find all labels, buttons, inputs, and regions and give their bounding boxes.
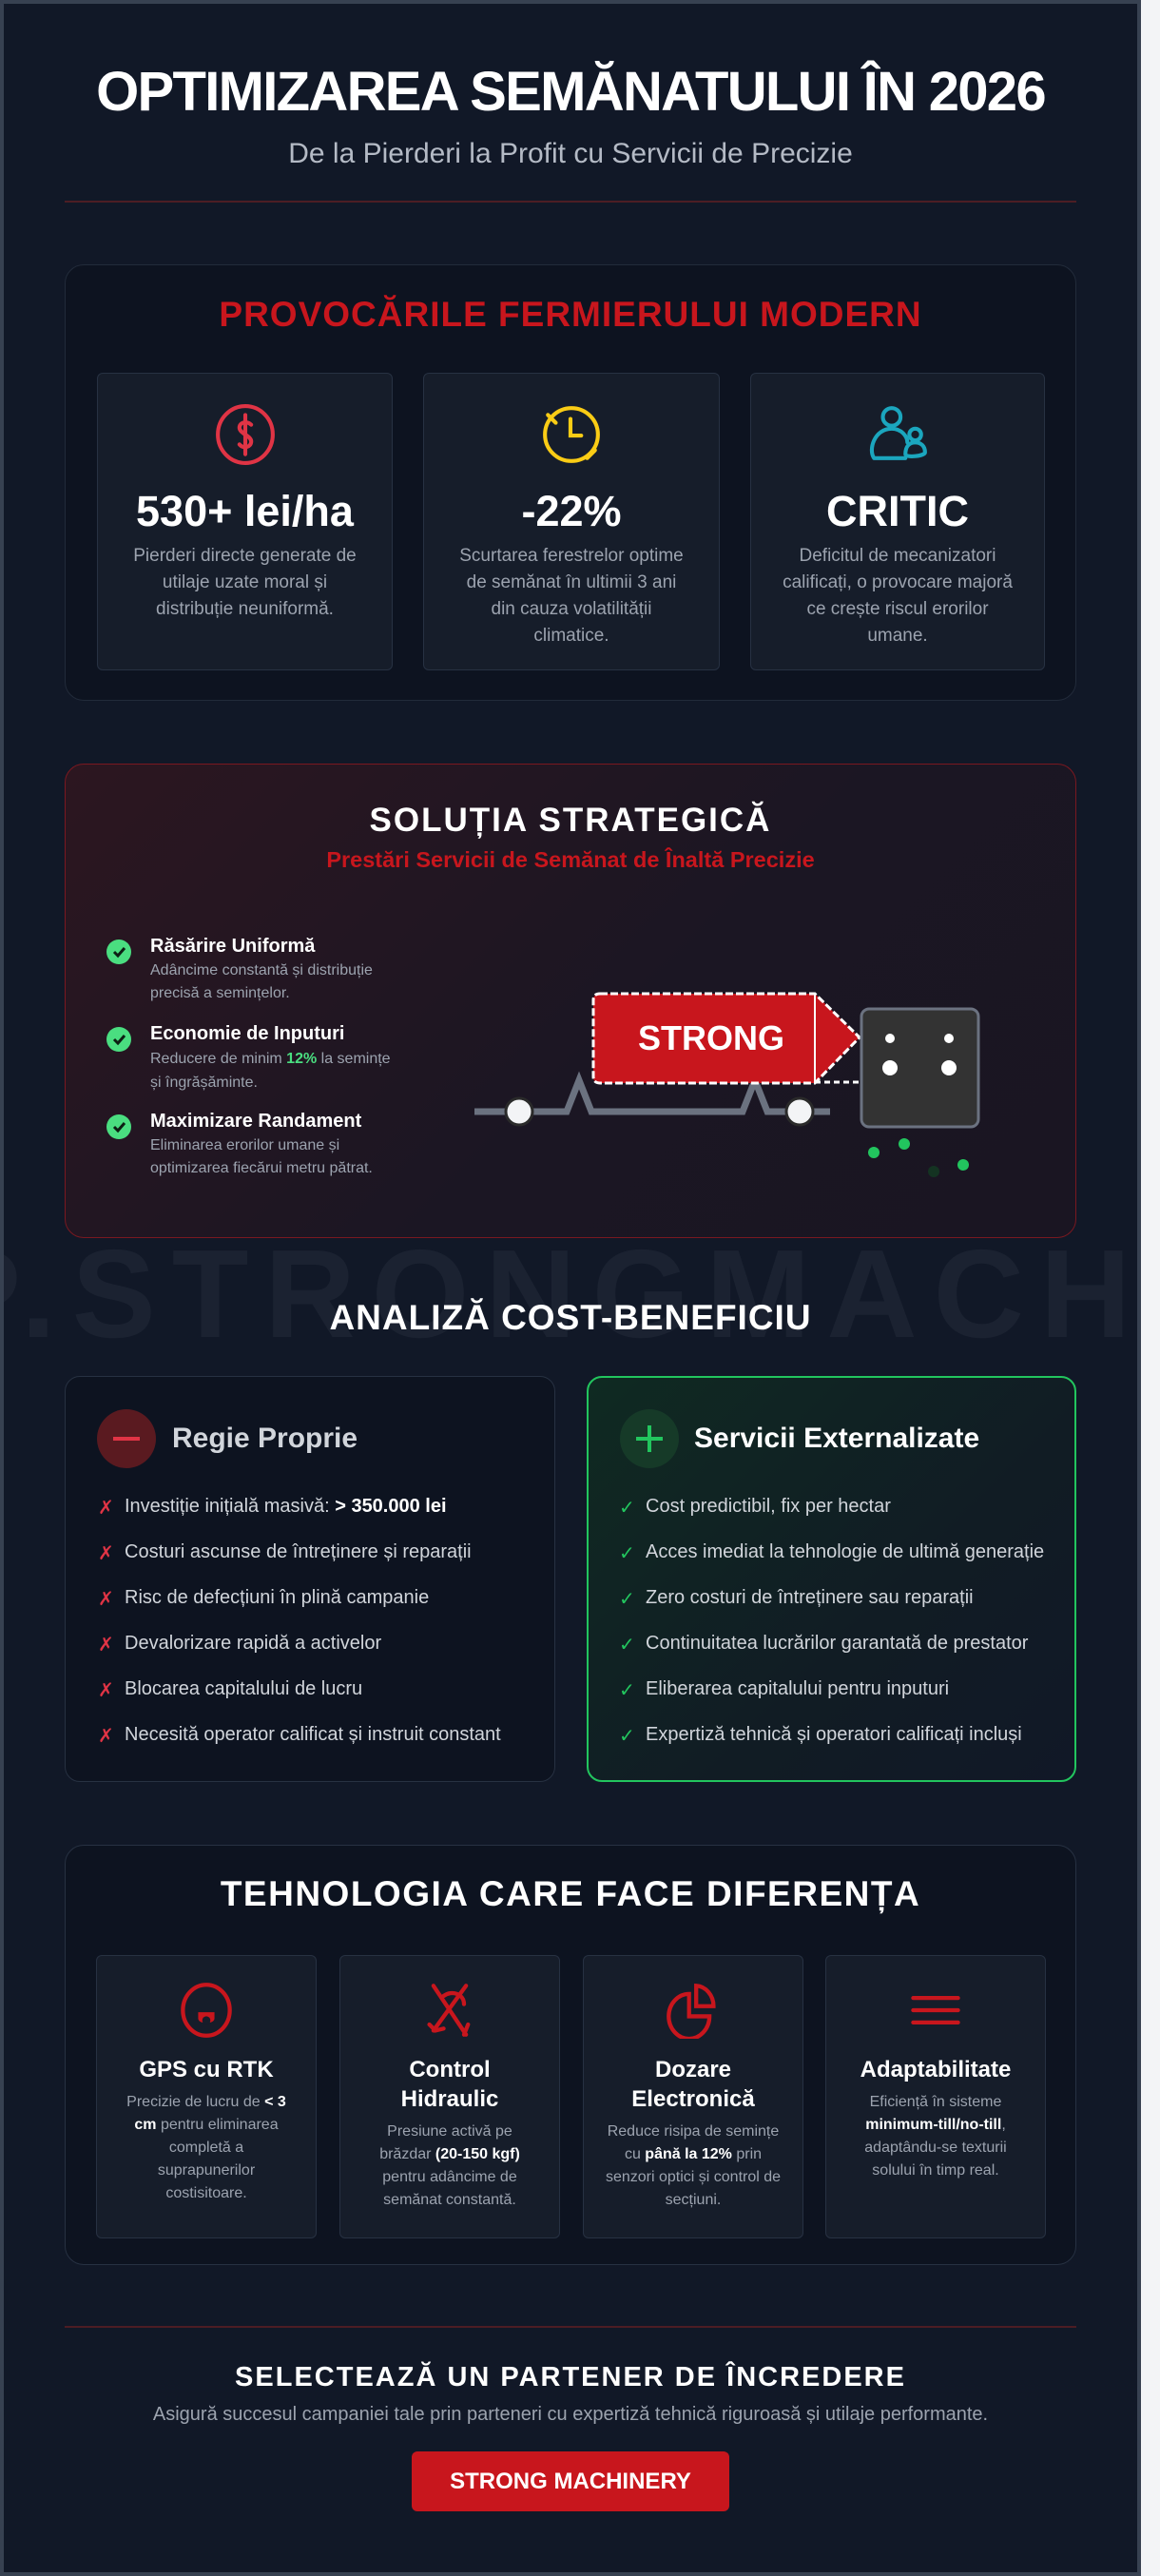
heading: solution: SOLUȚIA STRATEGICĂ xyxy=(370,802,771,839)
panel: own fleet: ✗ xyxy=(98,1498,114,1519)
panel: own fleet: Costuri ascunse de întreținere și reparații xyxy=(125,1541,472,1562)
illustration: seeder xyxy=(474,993,979,1177)
panel: outsourced: ✓ xyxy=(619,1543,635,1564)
heading: own: Regie Proprie xyxy=(172,1423,358,1454)
panel: outsourced: ✓ xyxy=(619,1726,635,1747)
checklist xyxy=(106,936,391,1176)
list: cons: Investiție inițială masivă: > 350.000 lei xyxy=(125,1496,447,1517)
card: hydraulic xyxy=(339,1955,560,2238)
panel: own fleet: Devalorizare rapidă a activelor xyxy=(125,1633,381,1654)
stat: 530+ lei/ha xyxy=(136,487,354,535)
card: workforce xyxy=(750,373,1045,670)
card: window: Scurtarea ferestrelor optime de semănat în ultimii 3 ani din cauza volatilității climatice. xyxy=(459,546,684,646)
heading: cost-benefit: ANALIZĂ COST-BENEFICIU xyxy=(329,1298,812,1337)
panel: outsourced: ✓ xyxy=(619,1589,635,1610)
icon: clock xyxy=(543,406,600,463)
panel: own fleet: Blocarea capitalului de lucru xyxy=(125,1678,362,1699)
panel: own fleet: ✗ xyxy=(98,1635,114,1656)
card: hydraulic: Control Hidraulic xyxy=(401,2057,498,2112)
panel: own fleet: Risc de defecțiuni în plină campanie xyxy=(125,1587,429,1608)
card: GPS: Precizie de lucru de < 3 cm pentru eliminarea completă a suprapunerilor costisitoare. xyxy=(126,2094,286,2201)
panel: own fleet: ✗ xyxy=(98,1543,114,1564)
icon: plus xyxy=(620,1409,679,1468)
panel: outsourced: ✓ xyxy=(619,1635,635,1656)
panel: outsourced: Continuitatea lucrărilor garantată de prestator xyxy=(646,1633,1028,1654)
panel: own fleet: ✗ xyxy=(98,1680,114,1701)
subheading: Prestări Servicii de Semănat de Înaltă Precizie xyxy=(326,847,815,872)
card: dosing xyxy=(583,1955,803,2238)
panel: own fleet: ✗ xyxy=(98,1726,114,1747)
illustration: seeder: STRONG xyxy=(638,1018,784,1057)
icon: dollar xyxy=(216,404,275,465)
item: uniform: Răsărire Uniformă xyxy=(150,936,315,957)
panel: outsourced: ✓ xyxy=(619,1498,635,1519)
card: dosing: Dozare Electronică xyxy=(631,2057,755,2112)
card: losses xyxy=(97,373,393,670)
button: STRONG MACHINERY xyxy=(450,2469,691,2494)
subtitle: De la Pierderi la Profit cu Servicii de Precizie xyxy=(288,138,853,169)
panel: challenges xyxy=(65,264,1076,701)
item: yield: Eliminarea erorilor umane și optimizarea fiecărui metru pătrat. xyxy=(150,1137,373,1176)
panel: own fleet: ✗ xyxy=(98,1589,114,1610)
CTA text: Asigură succesul campaniei tale prin parteneri cu expertiză tehnică riguroasă și utilaje performante. xyxy=(153,2404,988,2425)
panel: outsourced: ✓ xyxy=(619,1680,635,1701)
icon: minus xyxy=(97,1409,156,1468)
card: adaptability: Adaptabilitate xyxy=(860,2057,1011,2082)
heading: challenges: PROVOCĂRILE FERMIERULUI MODERN xyxy=(219,295,922,334)
card: adaptability: Eficiență în sisteme minimum-till/no-till, adaptându-se texturii solului în timp real. xyxy=(864,2094,1007,2179)
card: adaptability xyxy=(825,1955,1046,2238)
panel: own fleet: Necesită operator calificat și instruit constant xyxy=(125,1724,501,1745)
heading: CTA: SELECTEAZĂ UN PARTENER DE ÎNCREDERE xyxy=(235,2362,906,2392)
item: yield: Maximizare Randament xyxy=(150,1111,361,1132)
panel: own fleet xyxy=(65,1376,555,1782)
card: workforce: Deficitul de mecanizatori calificați, o provocare majoră ce crește riscul erorilor umane. xyxy=(783,546,1013,646)
heading: technology: TEHNOLOGIA CARE FACE DIFERENȚA xyxy=(221,1874,920,1913)
card: GPS: GPS cu RTK xyxy=(139,2057,274,2082)
item: uniform: Adâncime constantă și distribuție precisă a semințelor. xyxy=(150,962,373,1001)
panel: outsourced: Expertiză tehnică și operatori calificați incluși xyxy=(646,1724,1022,1745)
panel: outsourced: Zero costuri de întreținere sau reparații xyxy=(646,1587,974,1608)
panel: outsourced: Acces imediat la tehnologie de ultimă generație xyxy=(646,1541,1044,1562)
panel: outsourced: Eliberarea capitalului pentru inputuri xyxy=(646,1678,949,1699)
button xyxy=(412,2451,729,2511)
card: losses: Pierderi directe generate de utilaje uzate moral și distribuție neuniformă. xyxy=(133,546,357,619)
card: hydraulic: Presiune activă pe brăzdar (20-150 kgf) pentru adâncime de semănat constantă. xyxy=(379,2123,520,2208)
card: GPS xyxy=(96,1955,317,2238)
item: uniform xyxy=(106,936,373,1001)
item: inputs: Reducere de minim 12% la semințe și îngrășăminte. xyxy=(150,1051,391,1091)
title: OPTIMIZAREA SEMĂNATULUI ÎN 2026 xyxy=(96,61,1045,123)
item: inputs: Economie de Inputuri xyxy=(150,1023,344,1044)
stat: CRITIC xyxy=(826,487,969,535)
heading: outsourced: Servicii Externalizate xyxy=(694,1423,979,1454)
stat: -22% xyxy=(521,487,622,535)
item: yield xyxy=(106,1111,373,1176)
item: inputs xyxy=(106,1023,391,1091)
panel: technology xyxy=(65,1845,1076,2265)
panel: outsourced xyxy=(587,1376,1076,1782)
card: window xyxy=(423,373,720,670)
panel: solution xyxy=(65,764,1076,1238)
icon: users xyxy=(869,406,927,460)
list: pros: Cost predictibil, fix per hectar xyxy=(646,1496,891,1517)
card: dosing: Reduce risipa de semințe cu până la 12% prin senzori optici și control de secțiuni. xyxy=(606,2123,781,2208)
